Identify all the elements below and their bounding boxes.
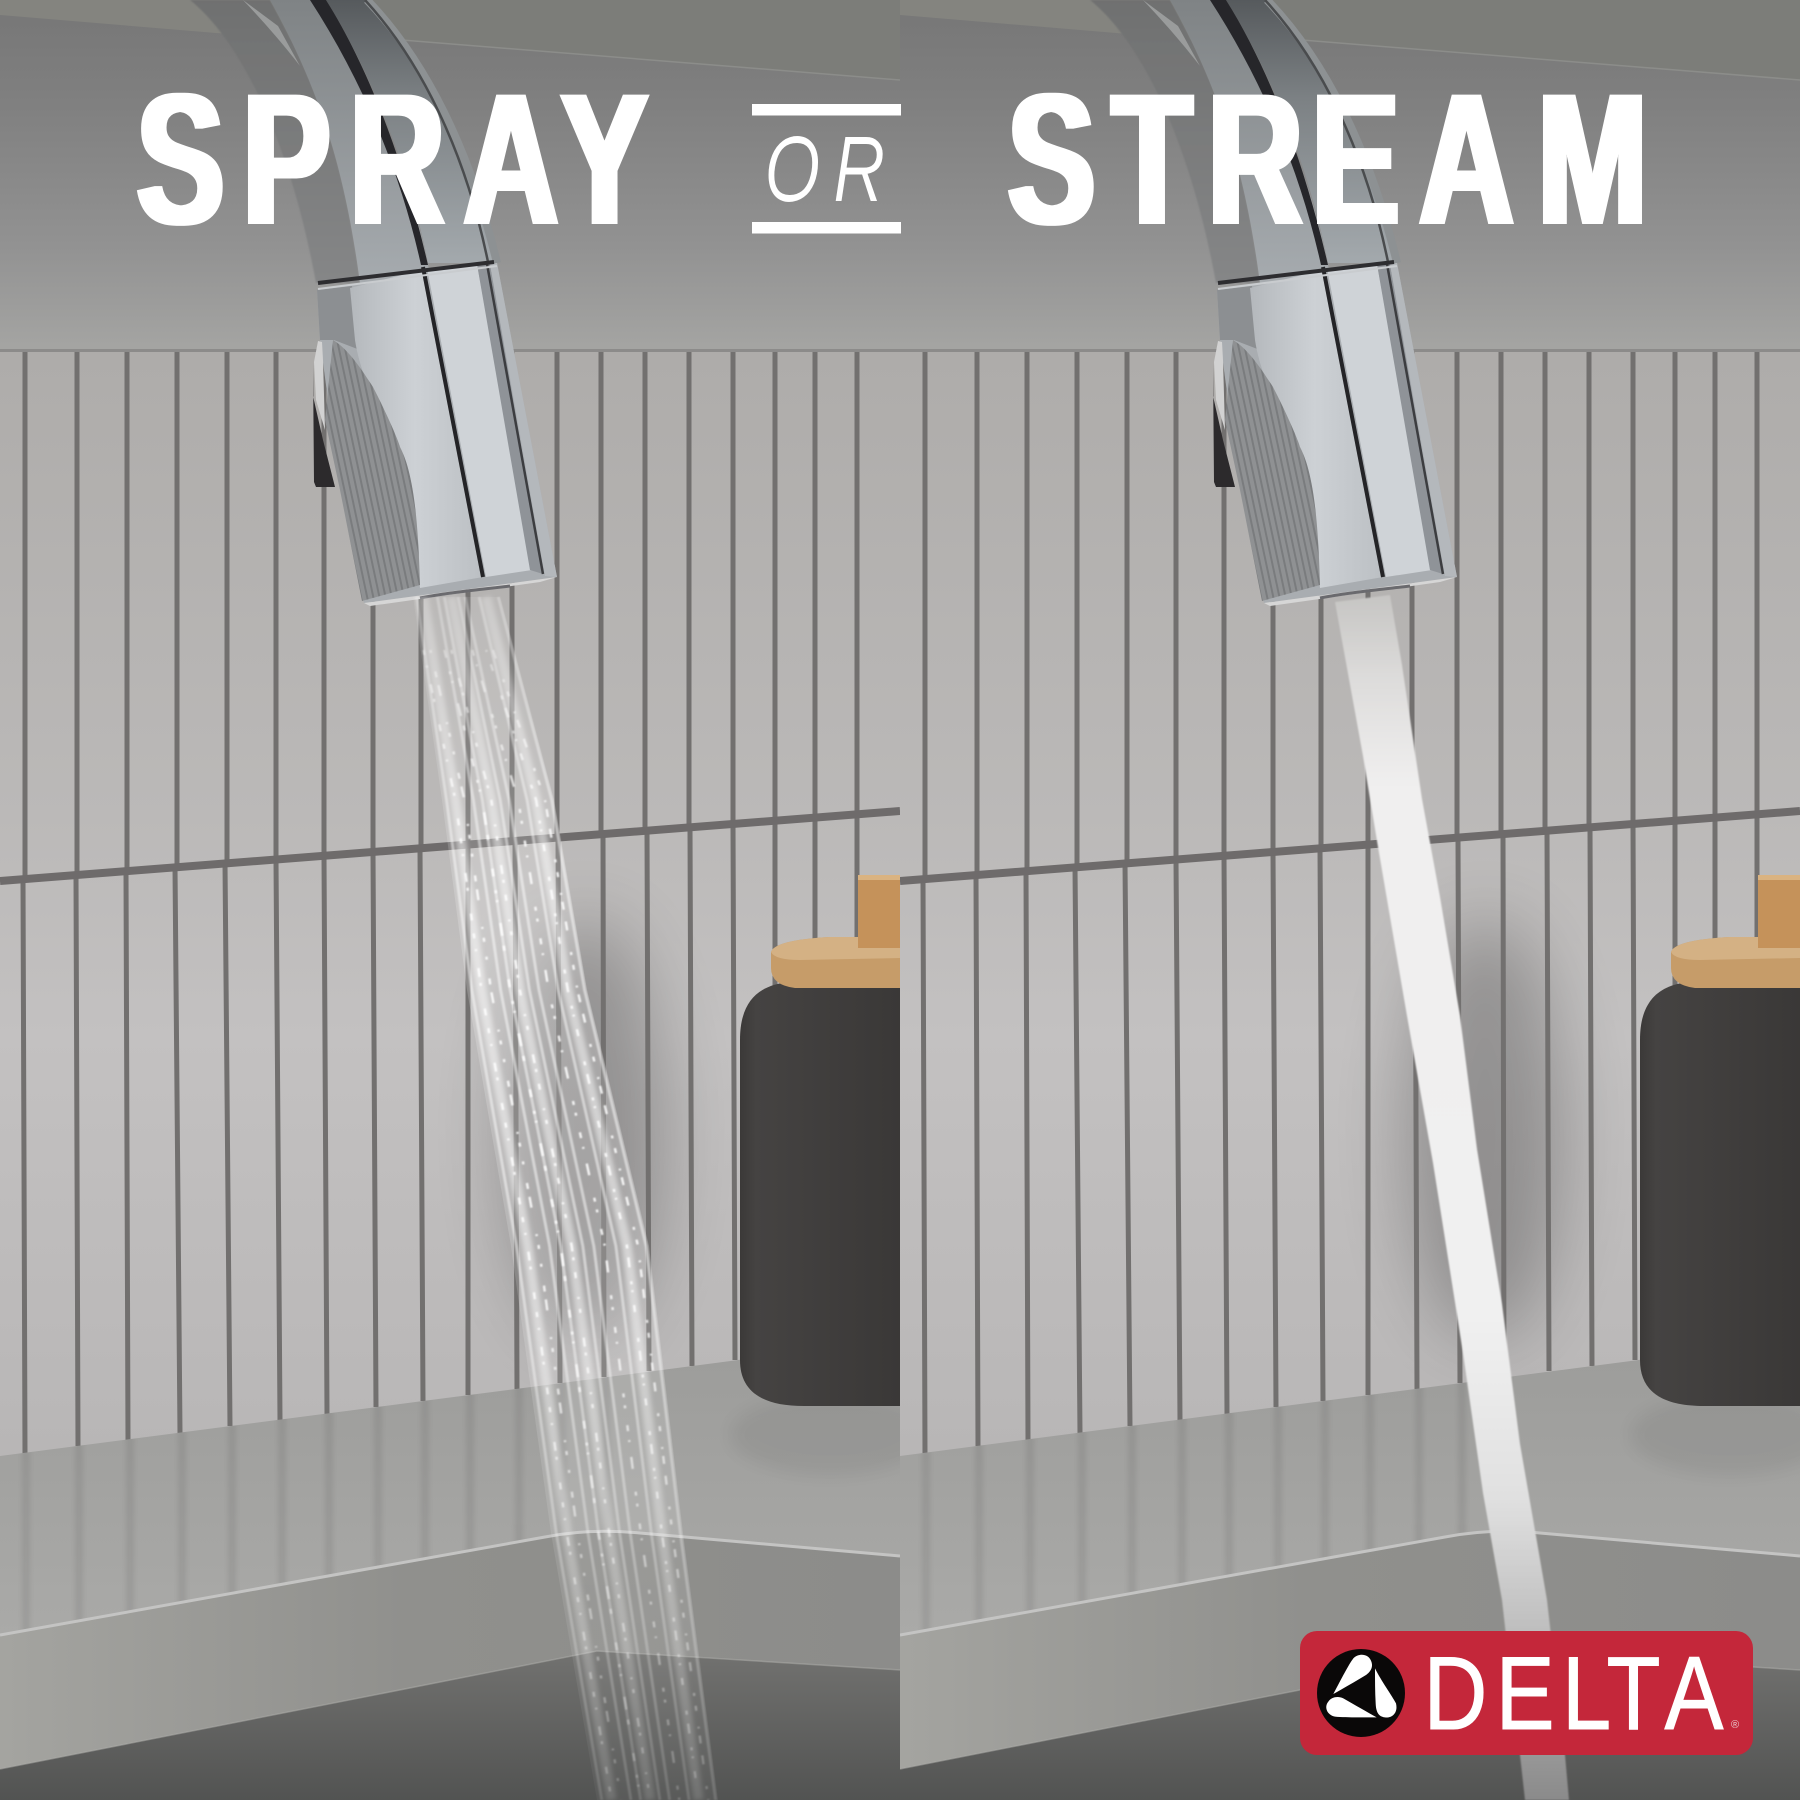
title: SPRAY: SPRAY bbox=[137, 55, 648, 265]
chrome faucet head bbox=[190, 0, 557, 606]
divider: OR with rules: OR bbox=[764, 117, 885, 221]
panel: spray mode bbox=[0, 0, 930, 1800]
water: solid stream bbox=[1335, 595, 1569, 1800]
icon: Delta triangle mark bbox=[1317, 1649, 1405, 1737]
chrome faucet head, right copy bbox=[1090, 0, 1457, 606]
title: STREAM: STREAM bbox=[1008, 55, 1647, 265]
wordmark: DELTA: DELTA bbox=[1423, 1636, 1724, 1752]
logo: Delta badge bbox=[1300, 1631, 1753, 1755]
divider: OR with rules bbox=[752, 104, 901, 234]
water: spray streaks bbox=[413, 597, 718, 1800]
registered mark: ® bbox=[1731, 1719, 1739, 1731]
kitchen backdrop: tiled wall, counter, sink and jar, right copy bbox=[900, 0, 1800, 1800]
kitchen backdrop: tiled wall, counter, sink and jar bbox=[0, 0, 930, 1800]
panel: stream mode bbox=[900, 0, 1800, 1800]
